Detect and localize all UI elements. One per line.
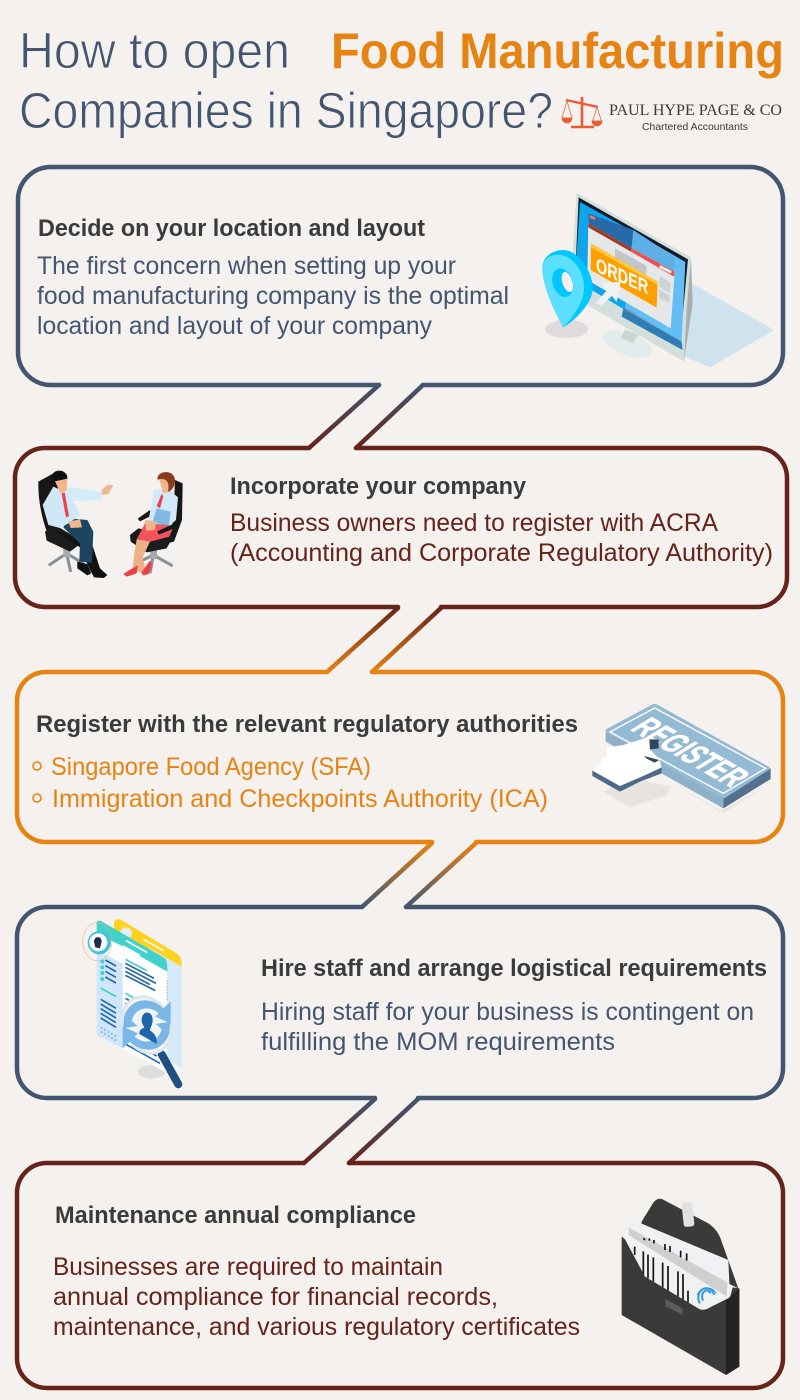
- connector: panel 4 to panel 5: [304, 1099, 418, 1163]
- panel 3 bullet list: Immigration and Checkpoints Authority (ICA): [52, 785, 548, 813]
- connector: panel 2 to panel 3: [327, 608, 441, 672]
- logo: Paul Hype Page & Co: PAUL HYPE PAGE & CO: [609, 102, 782, 119]
- panel 3 border: [17, 672, 783, 842]
- panel 1 body text: location and layout of your company: [37, 312, 432, 340]
- icon: CV documents with magnifying glass: [83, 919, 182, 1084]
- icon: scales of justice: [562, 97, 602, 128]
- woman in chair: [123, 472, 183, 577]
- icon: computer order screen with location pin: [542, 193, 774, 367]
- panel 4 body text: Hiring staff for your business is contingent on: [261, 998, 754, 1026]
- title: Companies in Singapore?: [19, 82, 553, 139]
- panel 3 bullet list: [33, 753, 548, 813]
- icon: two business people in a meeting: [38, 471, 183, 578]
- panel 5 body text: annual compliance for financial records,: [53, 1283, 498, 1311]
- title: [19, 22, 784, 139]
- panel 5 heading: Maintenance annual compliance: [55, 1202, 416, 1229]
- panel 3 heading: Register with the relevant regulatory authorities: [36, 711, 578, 738]
- panel: incorporate your company: [15, 448, 787, 607]
- logo: Paul Hype Page & Co: [562, 97, 782, 133]
- panel 2 border: [15, 448, 787, 607]
- connector: panel 3 to panel 4: [362, 843, 476, 907]
- panel 1 heading: Decide on your location and layout: [38, 215, 425, 242]
- panel 2 body text: [230, 509, 773, 567]
- panel 3 bullet list: Singapore Food Agency (SFA): [51, 753, 371, 781]
- panel: maintenance annual compliance: [17, 1163, 783, 1388]
- panel 1 body text: The first concern when setting up your: [37, 252, 456, 280]
- panel 5 body text: Businesses are required to maintain: [53, 1253, 443, 1281]
- panel: decide on location and layout: [18, 167, 783, 385]
- logo: Paul Hype Page & Co: Chartered Accountants: [642, 121, 748, 133]
- title: Food Manufacturing: [331, 23, 784, 79]
- panel: register with regulatory authorities: [17, 672, 783, 842]
- panel 1 border: [18, 167, 783, 385]
- icon: register button with pointer hand: [592, 704, 774, 813]
- icon: computer order screen with location pin: ORDER: [596, 255, 648, 299]
- icon: register button with pointer hand: REGISTER: [622, 713, 758, 792]
- panel 5 body text: maintenance, and various regulatory certificates: [53, 1313, 580, 1341]
- connector: panel 1 to panel 2: [309, 385, 423, 448]
- panel 4 body text: [261, 998, 754, 1056]
- panel 1 body text: food manufacturing company is the optimal: [37, 282, 509, 310]
- panel 2 body text: Business owners need to register with ACRA: [230, 509, 718, 537]
- panel 1 body text: [37, 252, 509, 340]
- panel 5 border: [17, 1163, 783, 1388]
- panel 4 heading: Hire staff and arrange logistical requirements: [261, 955, 767, 982]
- panel 4 border: [17, 907, 783, 1098]
- panel 2 heading: Incorporate your company: [230, 473, 527, 500]
- icon: black envelope folder with documents: [622, 1199, 739, 1375]
- panel 5 body text: [53, 1253, 580, 1341]
- panel 4 body text: fulfilling the MOM requirements: [261, 1028, 615, 1056]
- title: How to open: [19, 22, 290, 79]
- panel 2 body text: (Accounting and Corporate Regulatory Authority): [230, 539, 773, 567]
- panel: hire staff and logistical requirements: [17, 907, 783, 1098]
- man in chair: [38, 471, 113, 578]
